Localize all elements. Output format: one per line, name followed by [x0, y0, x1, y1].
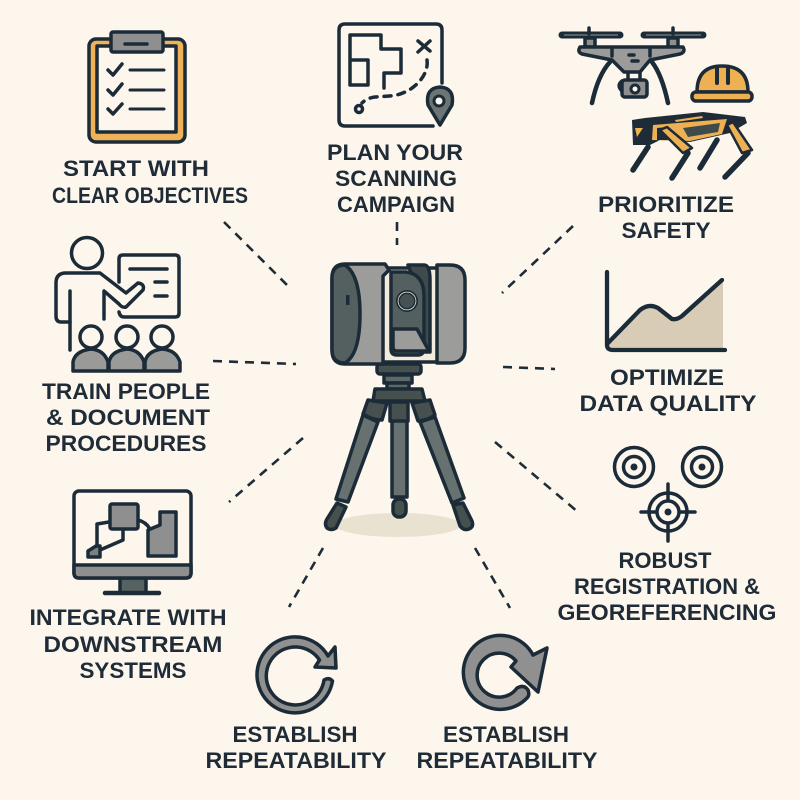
heading: START WITH [63, 156, 209, 181]
heading: ESTABLISH [232, 722, 358, 747]
panel: establish repeatability right [416, 635, 598, 773]
panel: train people and document procedures: PROCEDURES [46, 431, 206, 456]
panel: plan your scanning campaign [327, 24, 463, 217]
ground shadow [335, 513, 461, 537]
panel: robust registration and georeferencing [558, 448, 776, 625]
panel: robust registration and georeferencing: REGISTRATION & [574, 574, 760, 599]
panel: plan your scanning campaign: CAMPAIGN [337, 192, 455, 217]
panel: prioritize safety: SAFETY [622, 218, 711, 243]
panel: integrate with downstream systems [30, 491, 226, 683]
icon: drone [562, 28, 703, 103]
icon: clipboard [89, 32, 185, 142]
icon: survey targets [614, 448, 722, 541]
icon: monitor with workflow [74, 491, 191, 593]
heading: ROBUST [618, 548, 712, 573]
icon: cycle arrow thin [257, 637, 336, 713]
central laser scanner on tripod [326, 264, 473, 537]
panel: train people and document procedures: & DOCUMENT [46, 405, 211, 430]
heading: TRAIN PEOPLE [42, 379, 210, 404]
panel: plan your scanning campaign: SCANNING [335, 166, 457, 191]
icon: area chart [607, 272, 725, 350]
icon: robot dog [632, 112, 752, 178]
panel: optimize data quality [580, 272, 757, 416]
icon: site map with pin [339, 24, 452, 126]
panel: integrate with downstream systems: SYSTEMS [80, 658, 186, 683]
panel: establish repeatability right: REPEATABILITY [416, 748, 598, 773]
panel: integrate with downstream systems: DOWNSTREAM [44, 632, 222, 657]
heading: ESTABLISH [443, 722, 569, 747]
panel: start with clear objectives [52, 32, 248, 208]
icon: cycle arrow thick [463, 635, 547, 709]
tripod legs [326, 400, 473, 530]
heading: PRIORITIZE [598, 192, 734, 217]
connector dashes [213, 222, 578, 608]
panel: optimize data quality: DATA QUALITY [580, 391, 757, 416]
icon: hard hat [692, 66, 752, 101]
panel: establish repeatability left [206, 637, 387, 773]
heading: PLAN YOUR [327, 140, 463, 165]
heading: INTEGRATE WITH [30, 605, 226, 630]
icon: trainer with audience [56, 238, 180, 371]
heading: OPTIMIZE [610, 365, 724, 390]
panel: start with clear objectives: CLEAR OBJECTIVES [52, 183, 248, 208]
panel: robust registration and georeferencing: GEOREFERENCING [558, 600, 776, 625]
scanner body [332, 264, 465, 364]
tripod head [373, 364, 425, 401]
panel: prioritize safety [562, 28, 752, 243]
panel: establish repeatability left: REPEATABILITY [206, 748, 387, 773]
panel: train people and document procedures [42, 238, 211, 456]
